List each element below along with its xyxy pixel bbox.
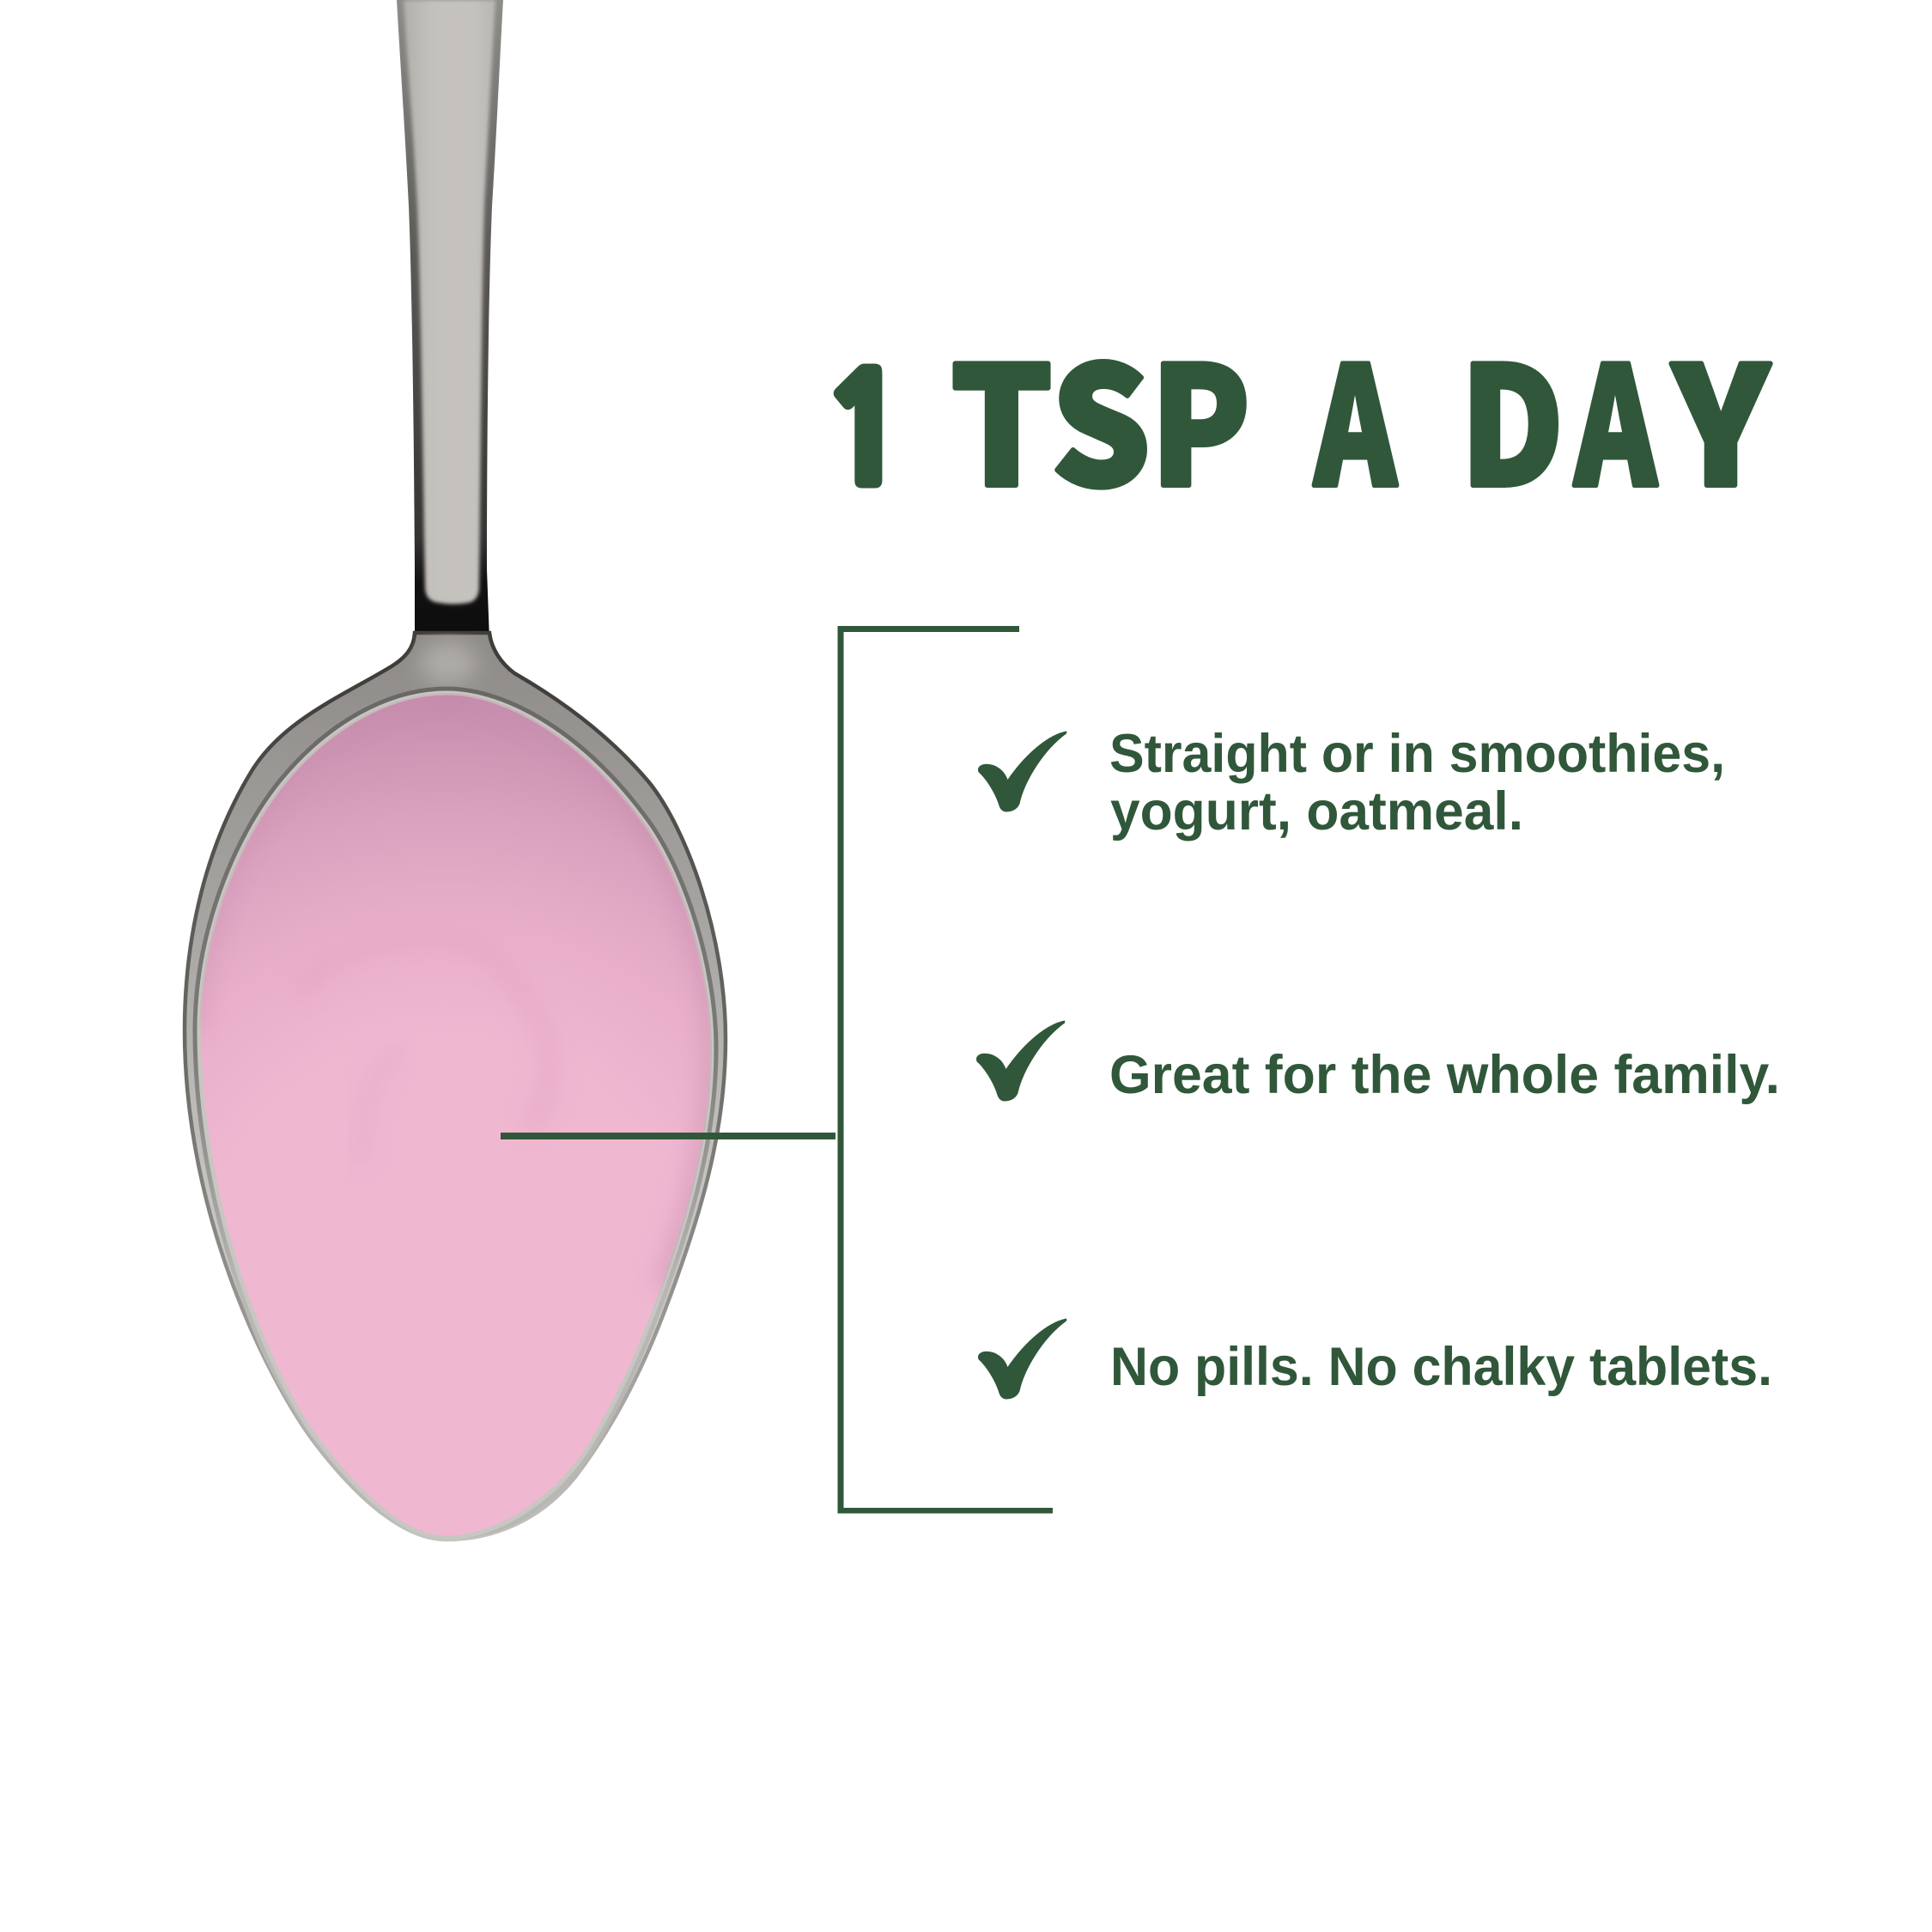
callout connector line — [501, 1133, 835, 1139]
benefit: whole family — [976, 1021, 1780, 1105]
icon: check mark — [978, 732, 1066, 811]
benefit text: No pills. No chalky tablets. — [1110, 1337, 1772, 1397]
spoon — [185, 0, 726, 1540]
bracket — [838, 626, 1053, 1513]
benefit: straight or in smoothies — [978, 724, 1725, 841]
title: 1 — [823, 356, 908, 506]
spoon bowl rim — [185, 633, 726, 1540]
title: S — [1051, 296, 1151, 532]
benefit: no pills — [978, 1319, 1772, 1399]
spoon handle — [397, 0, 503, 640]
benefit text: yogurt, oatmeal. — [1110, 781, 1523, 841]
title: D — [1461, 296, 1564, 532]
pink liquid in bowl — [199, 693, 712, 1538]
title: P — [1151, 296, 1250, 532]
icon: check mark — [976, 1021, 1065, 1101]
title: T — [951, 296, 1053, 532]
icon: check mark — [978, 1319, 1066, 1399]
benefit text: Straight or in smoothies, — [1109, 724, 1725, 784]
benefit text: Great for the whole family. — [1109, 1045, 1780, 1105]
title: A — [1573, 296, 1657, 532]
title: Y — [1671, 296, 1771, 532]
title: A — [1313, 296, 1397, 532]
